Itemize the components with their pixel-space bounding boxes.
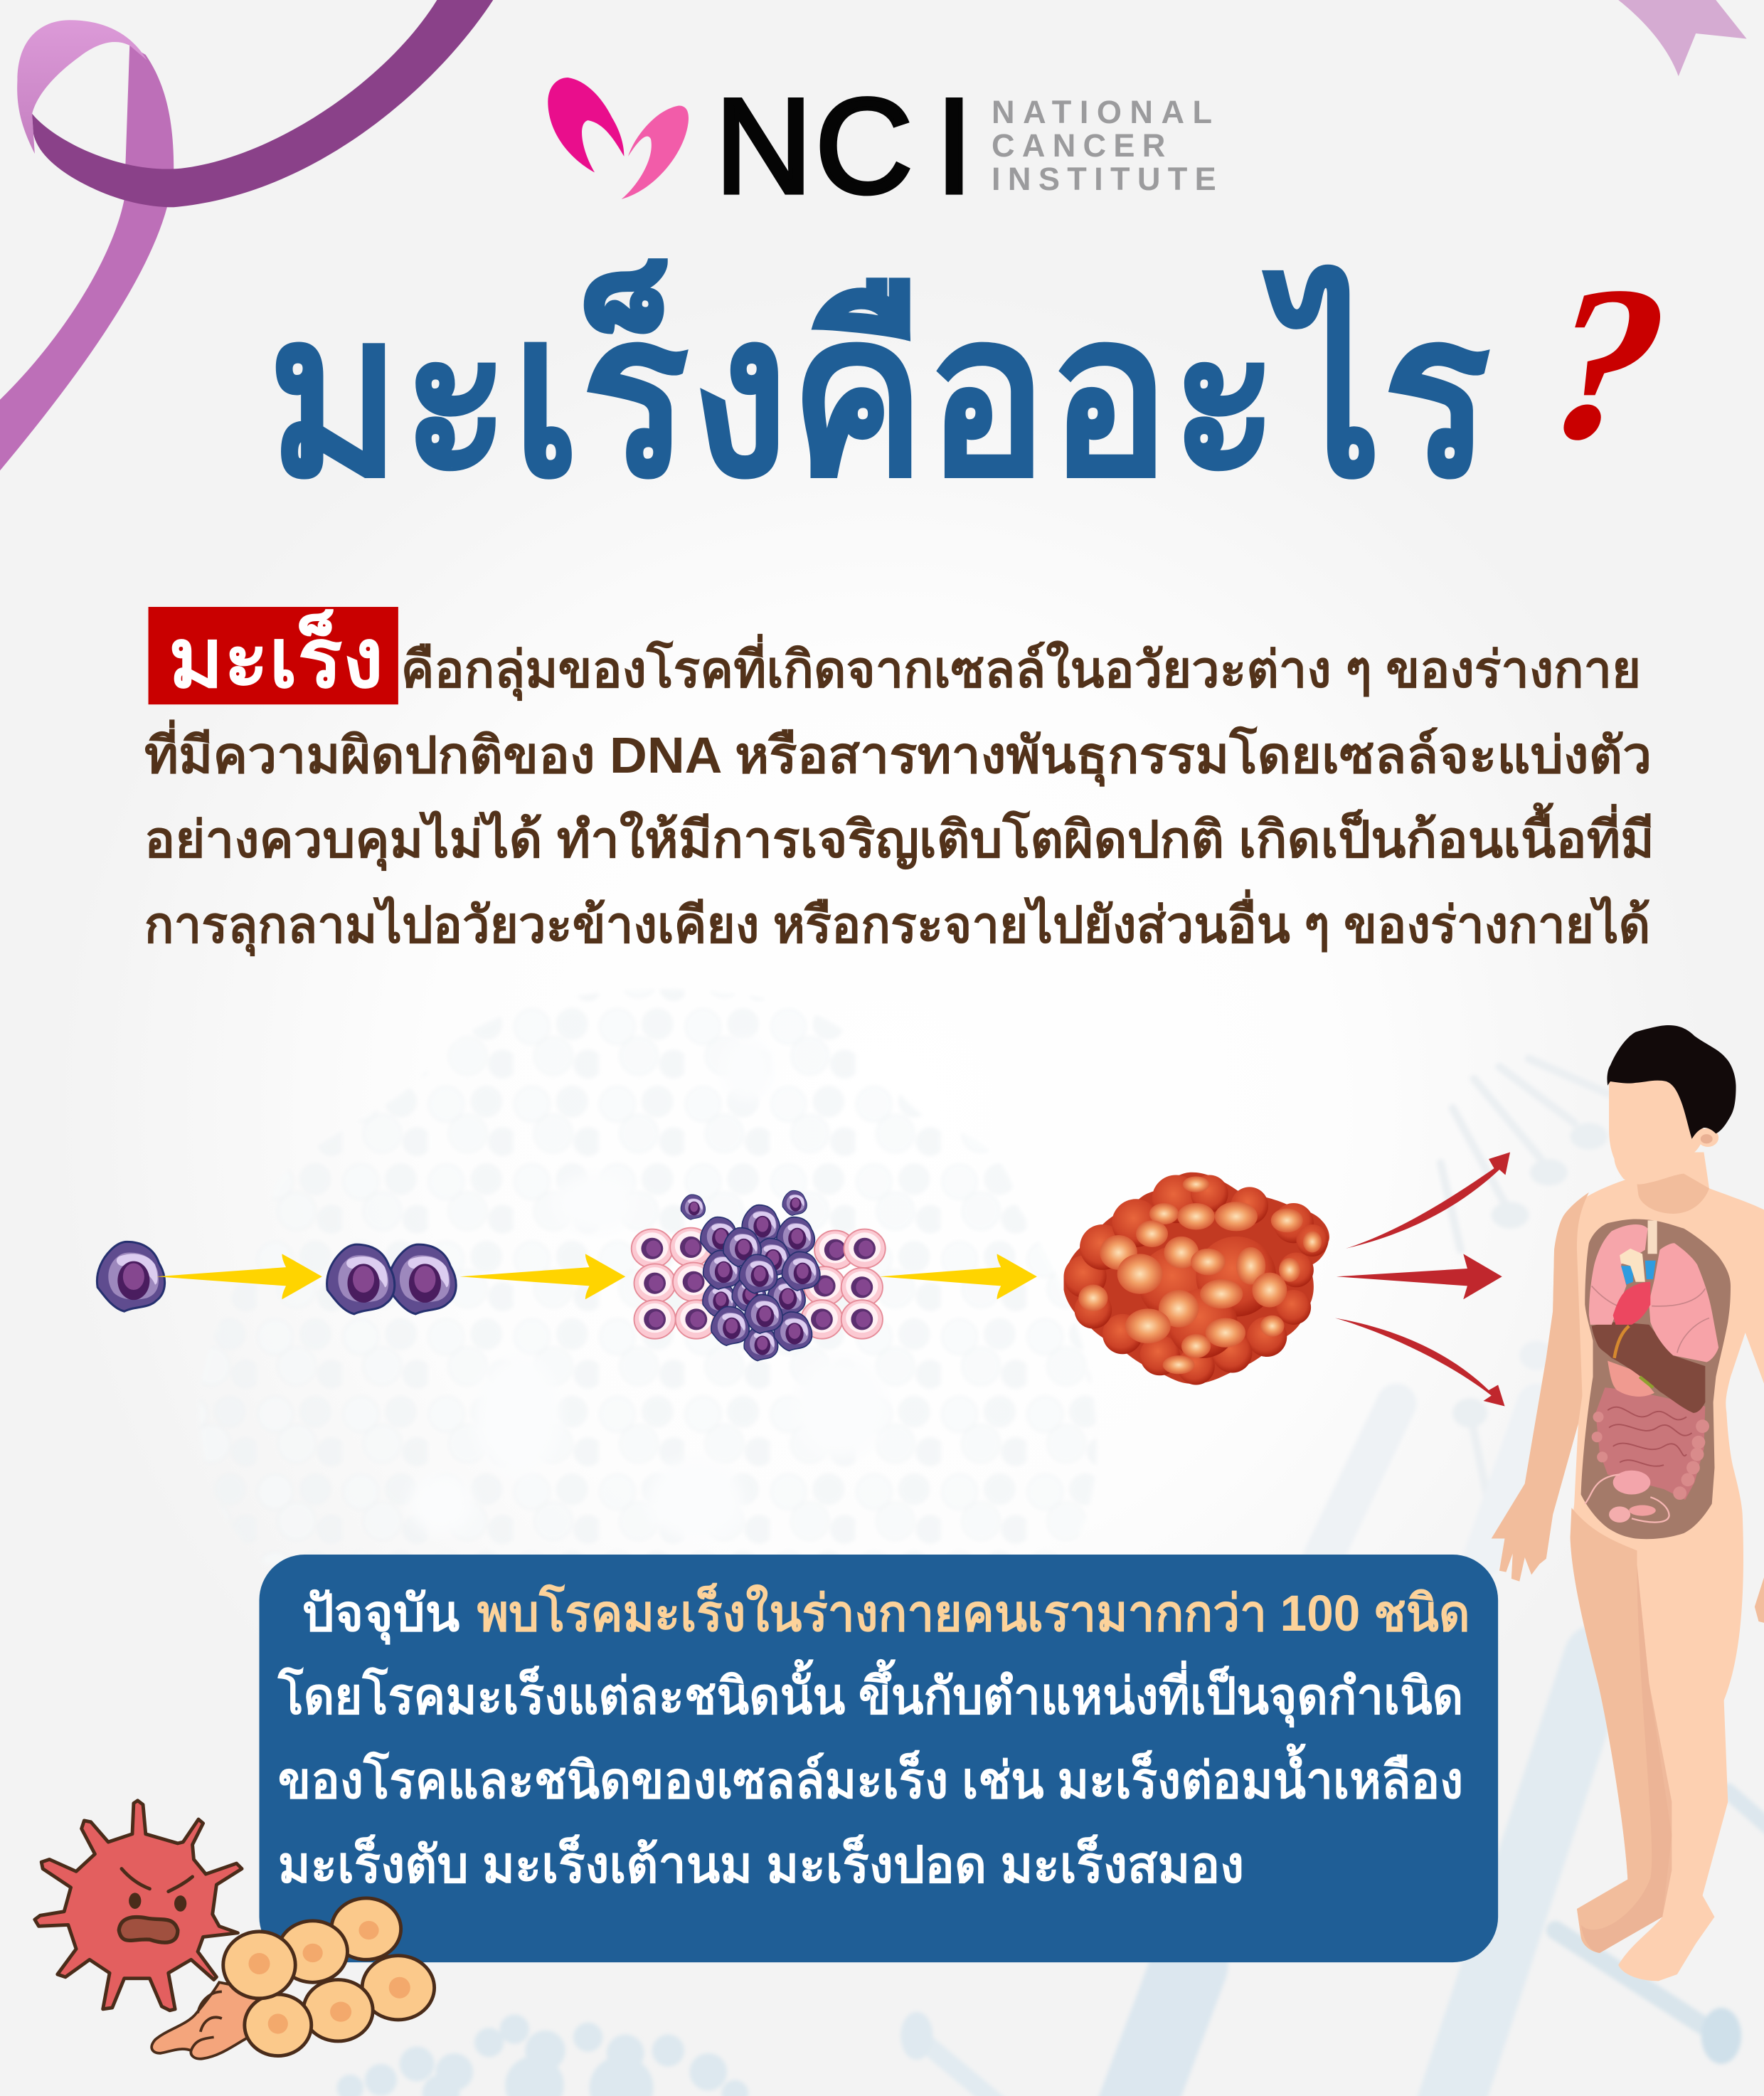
paragraph lines: ที่มีความผิดปกติของ DNA หรือสารทางพันธุกรรมโดยเซลล์จะแบ่งตัว bbox=[144, 719, 1652, 787]
tumor bbox=[1064, 1173, 1329, 1385]
paragraph lines bbox=[144, 634, 1654, 957]
angry cancer cell bbox=[35, 1801, 242, 2011]
NCI logo bbox=[548, 71, 1216, 222]
info line 1: ปัจจุบัน bbox=[302, 1585, 460, 1645]
info lines 2 to 4: มะเร็งตับ มะเร็งเต้านม มะเร็งปอด มะเร็งสมอง bbox=[278, 1833, 1244, 1893]
right lung bbox=[1649, 1243, 1718, 1362]
ear bbox=[1697, 1128, 1718, 1147]
arrow 2 bbox=[459, 1254, 625, 1299]
title: มะเร็งคืออะไร bbox=[267, 255, 1492, 524]
definition paragraph bbox=[144, 607, 1654, 957]
liver bbox=[1592, 1322, 1705, 1413]
body silhouette bbox=[1492, 1153, 1764, 1981]
butterfly mark bbox=[548, 78, 689, 199]
faint DNA strands bbox=[900, 1059, 1764, 2096]
awareness ribbon bbox=[0, 0, 493, 470]
institute name bbox=[992, 94, 1216, 197]
paragraph lines: คือกลุ่มของโรคที่เกิดจากเซลล์ในอวัยวะต่าง ๆ ของร่างกาย bbox=[401, 634, 1641, 702]
institute name: NATIONAL bbox=[992, 94, 1212, 130]
left lung bbox=[1589, 1224, 1648, 1325]
human body bbox=[1492, 1025, 1764, 1981]
institute name: INSTITUTE bbox=[992, 161, 1216, 197]
institute name: CANCER bbox=[992, 127, 1165, 164]
highlighted word: มะเร็ง bbox=[169, 609, 383, 705]
info lines 2 to 4: โดยโรคมะเร็งแต่ละชนิดนั้น ขึ้นกับตำแหน่งที่เป็นจุดกำเนิด bbox=[277, 1659, 1463, 1728]
cell tail bbox=[152, 1982, 267, 2059]
leg shading bbox=[1571, 1508, 1672, 1953]
info line 1: พบโรคมะเร็งในร่างกายคนเรามากกว่า 100 ชนิด bbox=[477, 1582, 1470, 1642]
right hand bbox=[1755, 1577, 1764, 1623]
ribbon tail bbox=[1618, 0, 1747, 76]
pelvic organs bbox=[1585, 1471, 1669, 1523]
arrow 3 bbox=[879, 1254, 1037, 1299]
paragraph lines: การลุกลามไปอวัยวะข้างเคียง หรือกระจายไปยังส่วนอื่น ๆ ของร่างกายได้ bbox=[144, 889, 1650, 957]
intestines bbox=[1592, 1387, 1709, 1500]
face bbox=[1609, 1077, 1704, 1185]
dividing cells bbox=[327, 1244, 456, 1314]
stomach bbox=[1608, 1361, 1654, 1397]
neck shadow bbox=[1637, 1174, 1709, 1214]
NCI letters: NCI bbox=[715, 71, 973, 222]
metastasis arrows bbox=[1335, 1153, 1510, 1407]
cell cluster bbox=[632, 1190, 886, 1361]
body shading bbox=[1492, 1192, 1589, 1582]
info lines 2 to 4: ของโรคและชนิดของเซลล์มะเร็ง เช่น มะเร็งต่อมน้ำเหลือง bbox=[278, 1743, 1463, 1809]
body cavity bbox=[1581, 1219, 1731, 1539]
single abnormal cell bbox=[97, 1242, 165, 1311]
leg fold bbox=[1581, 1565, 1672, 1953]
heart bbox=[1613, 1220, 1657, 1325]
faint virus illustration bbox=[200, 989, 1097, 1564]
info lines 2 to 4 bbox=[277, 1659, 1463, 1893]
question mark: ? bbox=[1516, 241, 1696, 485]
paragraph lines: อย่างควบคุมไม่ได้ ทำให้มีการเจริญเติบโตผิดปกติ เกิดเป็นก้อนเนื้อที่มี bbox=[144, 802, 1654, 871]
arrow 1 bbox=[156, 1254, 322, 1299]
faint lower virus bbox=[336, 2014, 748, 2096]
lung lobes bbox=[1592, 1286, 1709, 1353]
info panel bbox=[259, 1555, 1498, 1962]
hair bbox=[1607, 1025, 1736, 1139]
healthy cell group bbox=[152, 1898, 435, 2059]
